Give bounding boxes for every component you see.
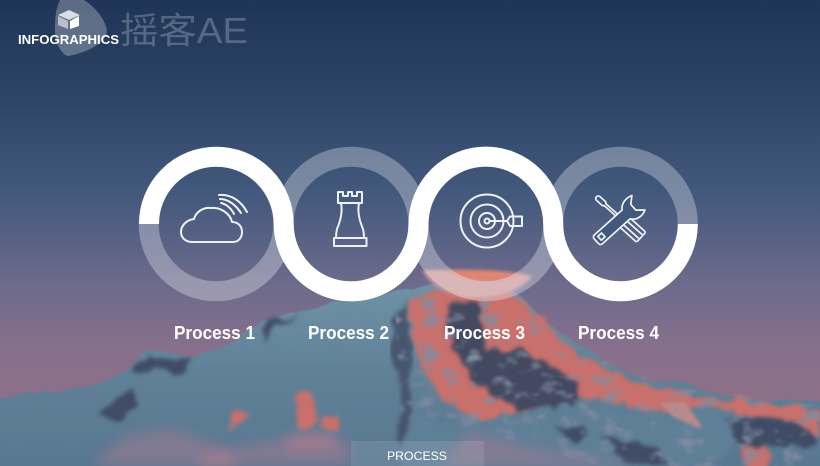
dark ridge left	[100, 312, 300, 422]
label: process 2: Process 2	[308, 323, 389, 343]
logo wordmark: INFOGRAPHICS	[18, 33, 119, 47]
logo cube icon	[58, 10, 80, 29]
wrench	[589, 195, 646, 249]
tab background	[351, 441, 484, 466]
pink streaks lower right	[745, 402, 820, 466]
blue snow slope right	[400, 405, 735, 466]
dark rock band centre	[392, 300, 412, 440]
background: snowy mountain	[0, 282, 820, 466]
dark rock in pink face	[448, 302, 580, 412]
icon: target with arrow	[460, 194, 522, 248]
label: process 4: Process 4	[578, 323, 659, 343]
icon: crossed tools	[589, 192, 646, 249]
rock speckle on the rock face	[395, 290, 820, 466]
mountain silhouette	[0, 282, 820, 466]
low clouds	[90, 428, 640, 466]
faint full rings	[149, 157, 688, 291]
pink patch on snow right	[660, 402, 702, 428]
label: process 1: Process 1	[174, 323, 255, 343]
bottom tab	[351, 441, 484, 466]
dark rocks lower right	[555, 418, 820, 466]
watermark blob	[55, 0, 107, 56]
watermark logo	[55, 0, 248, 56]
icon: chess rook	[334, 192, 366, 246]
screwdriver	[592, 192, 646, 242]
process rings	[149, 157, 688, 291]
logo	[18, 10, 119, 47]
summit cloud	[422, 270, 532, 298]
pink patches left of summit	[228, 392, 338, 432]
pink rock face	[410, 286, 820, 440]
cloud body	[422, 270, 532, 298]
labels	[174, 323, 659, 343]
watermark text: 摇客AE	[120, 10, 248, 51]
tab label: PROCESS	[387, 449, 447, 463]
icon: cloud with signal	[181, 195, 247, 242]
white wave connector	[149, 157, 688, 291]
pink streak beside the dark rock	[492, 300, 510, 350]
label: process 3: Process 3	[444, 323, 525, 343]
cloud glow	[445, 270, 520, 281]
